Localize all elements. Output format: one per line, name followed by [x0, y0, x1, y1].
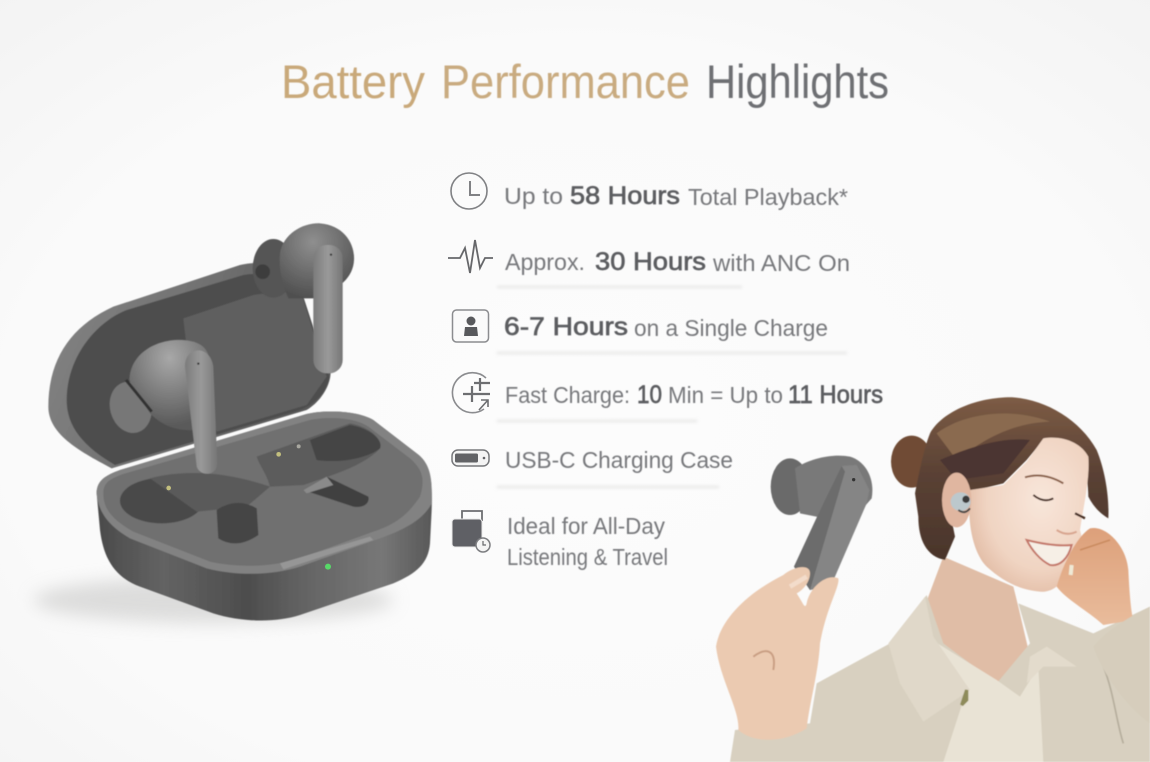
icon: pulse waveform: [448, 240, 493, 273]
raised right hand: [1057, 528, 1133, 625]
feature: fast charge: [505, 381, 883, 409]
person: woman with earbud: [716, 397, 1150, 762]
front earbud: [104, 340, 217, 474]
feature: usb-c charging case: USB-C Charging Case: [505, 447, 733, 473]
icon: fast charge: [452, 373, 490, 413]
lid interior: [67, 274, 329, 465]
icon: suitcase with clock: [452, 511, 490, 552]
case tray: [103, 418, 423, 566]
center post: [217, 503, 258, 543]
title: Battery: [281, 55, 425, 108]
feature: 30 hours with ANC: with ANC On: [712, 250, 850, 276]
smile: [1027, 540, 1072, 565]
icon: earbud in box: [452, 310, 488, 342]
product: charging case with earbuds: [33, 223, 432, 623]
held earbud: [771, 456, 872, 590]
feature: 30 hours with ANC: 30 Hours: [595, 248, 706, 276]
sleeve: [1093, 607, 1150, 723]
feature: 6-7 hours single charge: 6-7 Hours: [504, 313, 628, 341]
feature: fast charge: Min = Up to: [668, 382, 783, 408]
feature: 30 hours with ANC: Approx.: [505, 249, 585, 275]
right earbud well: [257, 423, 381, 487]
case lid: [48, 263, 331, 468]
charging contacts: [166, 444, 301, 490]
feature: 58 hours total playback: [504, 182, 848, 210]
feature: ideal for all-day listening and travel: Listening & Travel: [507, 544, 668, 570]
case base: [97, 411, 432, 620]
icon: clock: [451, 173, 487, 209]
raised left hand holding earbud: [716, 567, 838, 740]
feature: 6-7 hours single charge: [504, 313, 828, 341]
feature: ideal for all-day listening and travel: [507, 513, 668, 570]
feature: fast charge: 10: [637, 381, 662, 409]
title: Performance: [441, 55, 690, 108]
feature: 58 hours total playback: Up to: [504, 183, 563, 209]
left earbud well: [120, 478, 203, 523]
feature: fast charge: 11 Hours: [788, 381, 883, 409]
back earbud: [253, 223, 354, 373]
icon: usb-c battery: [452, 450, 489, 466]
shirt: [730, 595, 1150, 762]
feature: 58 hours total playback: 58 Hours: [570, 182, 680, 210]
title: Highlights: [706, 55, 889, 108]
ear with earbud: [942, 473, 971, 527]
feature: 58 hours total playback: Total Playback*: [688, 184, 848, 210]
hair: [891, 397, 1108, 560]
hinge notch: [280, 537, 373, 569]
face: [969, 438, 1089, 592]
feature: fast charge: Fast Charge:: [505, 382, 630, 408]
feature: ideal for all-day listening and travel: Ideal for All-Day: [507, 513, 665, 539]
neck: [923, 557, 1030, 690]
feature: 6-7 hours single charge: on a Single Charge: [634, 315, 828, 341]
feature: 30 hours with ANC: [505, 248, 850, 276]
green status led: [325, 564, 331, 570]
title: [281, 55, 889, 108]
